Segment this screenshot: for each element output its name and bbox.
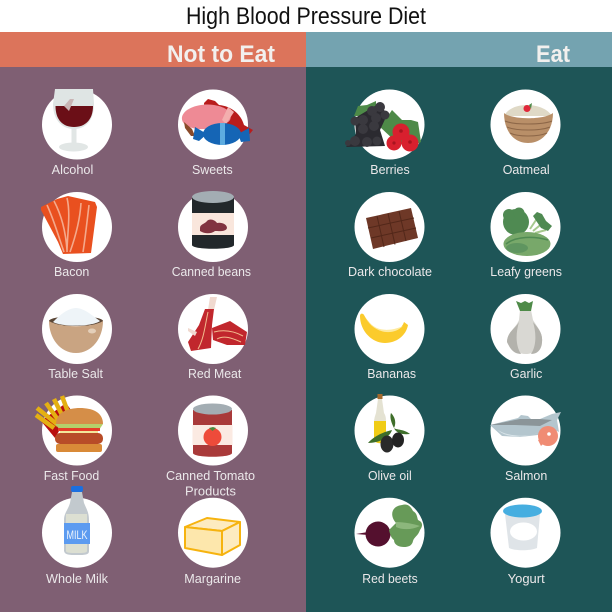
label: Berries xyxy=(370,163,410,177)
icon: salt bowl xyxy=(49,308,103,353)
icon: garlic xyxy=(507,301,542,354)
label: Yogurt xyxy=(508,572,545,586)
label: Red Meat xyxy=(188,367,242,381)
label: Bacon xyxy=(54,265,89,279)
label: Dark chocolate xyxy=(348,265,432,279)
label: Garlic xyxy=(510,367,542,381)
heading: eat: Eat xyxy=(536,41,570,68)
icon: burger and fries xyxy=(36,396,103,452)
title: High Blood Pressure Diet xyxy=(186,3,426,30)
label line 2: Products xyxy=(185,485,236,499)
panel: not to eat xyxy=(0,32,306,612)
label: Canned beans xyxy=(172,265,251,279)
label: Alcohol xyxy=(52,163,93,177)
item: berries xyxy=(345,90,424,177)
label: Bananas xyxy=(367,367,416,381)
item: leafy greens xyxy=(490,192,562,279)
item: canned beans xyxy=(172,191,251,279)
label: Olive oil xyxy=(368,469,412,483)
icon: oil and olives xyxy=(368,394,410,452)
icon: sweets xyxy=(182,99,253,145)
label: Sweets xyxy=(192,163,233,177)
item: fast food xyxy=(36,396,112,483)
item: yogurt xyxy=(490,498,560,586)
item: dark chocolate xyxy=(348,192,432,279)
label: Oatmeal xyxy=(503,163,550,177)
icon: milk bottle: MILK xyxy=(66,530,88,542)
item: garlic xyxy=(490,294,560,381)
item: red meat xyxy=(178,294,248,381)
item: table salt xyxy=(42,294,112,381)
label: Table Salt xyxy=(48,367,104,381)
icon: chocolate bar xyxy=(366,208,418,249)
label: Red beets xyxy=(362,572,418,586)
label: Canned Tomato xyxy=(166,469,255,483)
icon: red meat xyxy=(188,297,247,351)
item: salmon xyxy=(490,396,561,483)
item: margarine xyxy=(178,498,248,586)
item: bananas xyxy=(354,294,424,381)
icon: beet xyxy=(356,504,422,547)
item: red beets xyxy=(354,498,424,586)
heading: not to eat: Not to Eat xyxy=(167,41,275,68)
item: whole milk xyxy=(42,486,112,586)
item: alcohol xyxy=(42,89,112,177)
icon: salmon xyxy=(490,412,561,446)
icon: berries xyxy=(345,101,421,152)
icon: leafy greens xyxy=(503,208,552,256)
label: Salmon xyxy=(505,469,547,483)
item: sweets xyxy=(178,90,253,177)
icon: tomato can xyxy=(192,404,232,457)
label: Leafy greens xyxy=(490,265,562,279)
icon: bean can xyxy=(192,191,234,249)
item: oatmeal xyxy=(490,90,560,177)
icon: yogurt cup xyxy=(503,504,542,550)
label: Whole Milk xyxy=(46,572,109,586)
icon: wine glass xyxy=(53,89,94,152)
label: Fast Food xyxy=(44,469,99,483)
icon: bacon xyxy=(41,196,97,254)
item: olive oil xyxy=(354,394,424,483)
icon: banana xyxy=(360,314,408,343)
icon: margarine block xyxy=(185,518,240,555)
label: Margarine xyxy=(184,572,241,586)
item: bacon xyxy=(41,192,112,279)
panel: eat xyxy=(306,32,612,612)
icon: oatmeal bowl xyxy=(504,103,553,143)
item: canned tomato products xyxy=(166,396,255,499)
